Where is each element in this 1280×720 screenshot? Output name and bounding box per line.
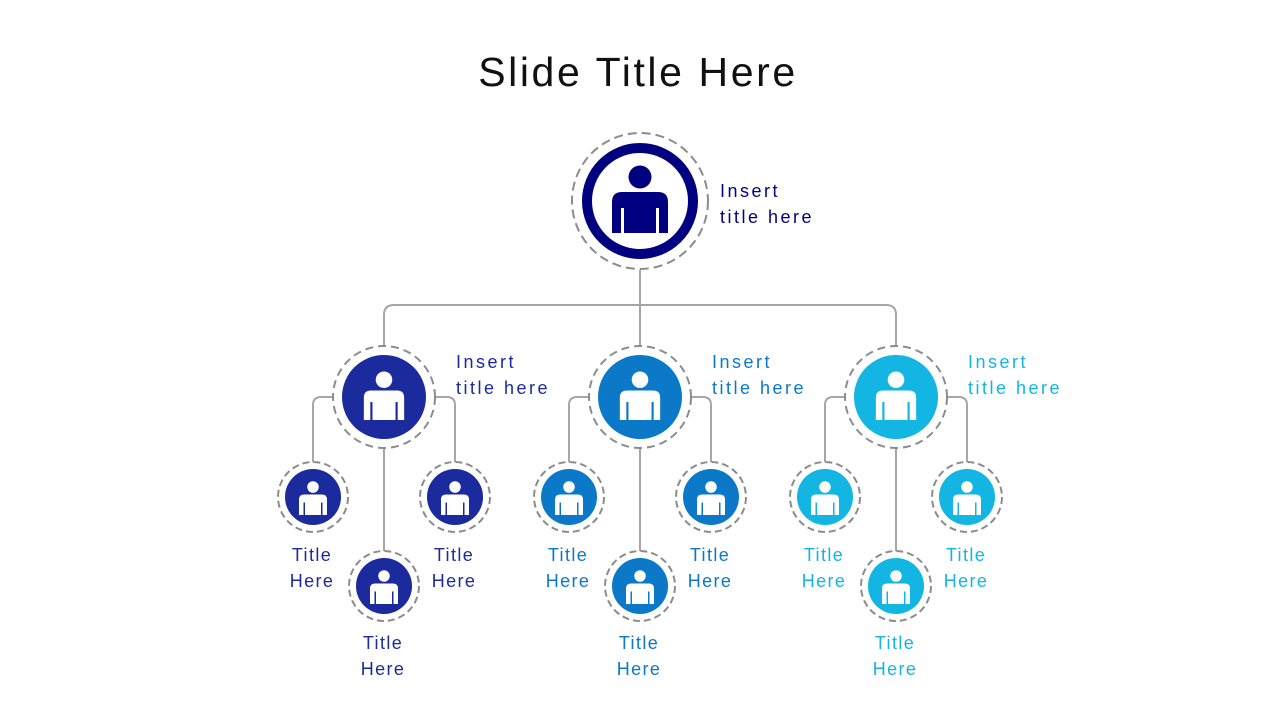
group 2: Here — [546, 571, 590, 591]
top node — [572, 133, 708, 269]
group 3: Title — [875, 633, 915, 653]
group 1: Here — [290, 571, 334, 591]
top label: Insert — [720, 181, 780, 201]
connectors: top level — [384, 270, 896, 346]
group 2: Title — [619, 633, 659, 653]
group 1: Title — [363, 633, 403, 653]
group 3: Here — [802, 571, 846, 591]
title: Slide Title Here — [478, 49, 798, 95]
group 1 — [278, 346, 550, 679]
group 2: Here — [617, 659, 661, 679]
group 2: title here — [712, 378, 806, 398]
top label: title here — [720, 207, 814, 227]
group 2: Here — [688, 571, 732, 591]
group 1: Here — [361, 659, 405, 679]
group 1: Insert — [456, 352, 516, 372]
group 2 — [534, 346, 806, 679]
group 3: Here — [944, 571, 988, 591]
group 2: Insert — [712, 352, 772, 372]
group 1: Title — [434, 545, 474, 565]
group 1: Title — [292, 545, 332, 565]
group 3: title here — [968, 378, 1062, 398]
group 3: Title — [804, 545, 844, 565]
group 1: Here — [432, 571, 476, 591]
group 3: Here — [873, 659, 917, 679]
group 3: Insert — [968, 352, 1028, 372]
group 3 — [790, 346, 1062, 679]
group 1: title here — [456, 378, 550, 398]
group 3: Title — [946, 545, 986, 565]
group 2: Title — [548, 545, 588, 565]
group 2: Title — [690, 545, 730, 565]
